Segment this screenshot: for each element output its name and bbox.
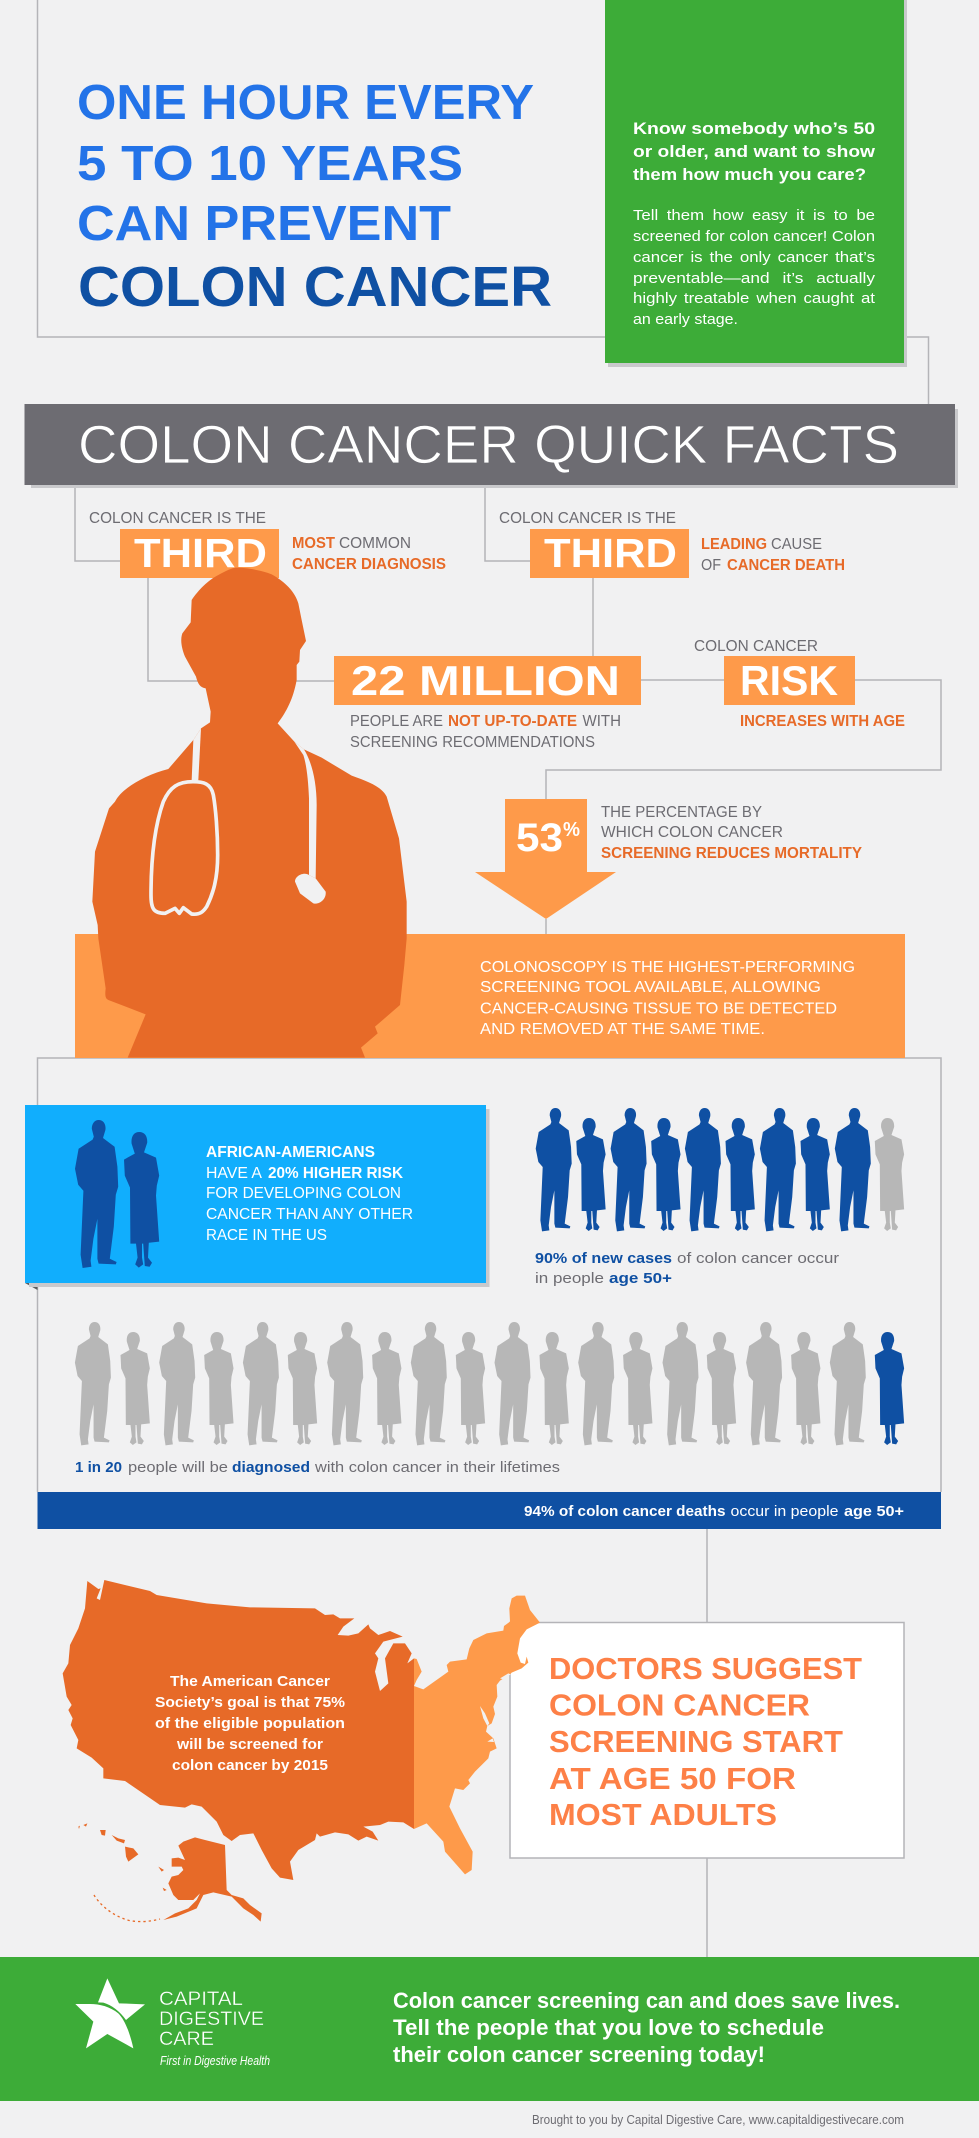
panel: doctors suggest: DOCTORS SUGGEST [549, 1652, 862, 1686]
map caption: colon cancer by 2015 [172, 1757, 328, 1774]
fact: 22 million: 22 MILLION [351, 657, 620, 704]
heading band: quick facts [24, 404, 958, 488]
intro body: preventable—and it’s actually [633, 270, 876, 287]
panel: colonoscopy band: CANCER-CAUSING TISSUE TO BE DETECTED [480, 1000, 837, 1018]
callout text [206, 1144, 413, 1244]
fact: risk increases with age: INCREASES WITH AGE [740, 713, 905, 730]
logo wordmark: CARE [159, 2029, 214, 2050]
fact: 22 million: SCREENING RECOMMENDATIONS [350, 734, 595, 751]
text: percentage reduction: THE PERCENTAGE BY [601, 804, 762, 821]
text: 1 in 20 diagnosed: diagnosed [232, 1459, 310, 1476]
text: percentage reduction: WHICH COLON CANCER [601, 824, 783, 841]
intro question [633, 120, 875, 184]
text: 90 percent of new cases: age 50+ [609, 1270, 672, 1287]
map caption: will be screened for [176, 1736, 323, 1753]
heading band: quick facts: COLON CANCER QUICK FACTS [78, 416, 899, 475]
footer call to action [393, 1988, 900, 2067]
fact: third leading cause of death: THIRD [544, 530, 677, 576]
text: 1 in 20 diagnosed: 1 in 20 [75, 1459, 122, 1476]
intro body: an early stage. [633, 311, 738, 328]
arrow: 53 percent: 53 [516, 816, 563, 860]
text: 90 percent of new cases: 90% of new cases [535, 1250, 672, 1267]
banner: 94 percent of deaths: age 50+ [844, 1503, 904, 1520]
credit line: Brought to you by Capital Digestive Care, www.capitaldigestivecare.com [532, 2113, 904, 2127]
footer call to action: their colon cancer screening today! [393, 2042, 765, 2067]
fact: risk increases with age: COLON CANCER [694, 638, 818, 655]
footer call to action: Tell the people that you love to schedule [393, 2015, 824, 2040]
callout text: CANCER THAN ANY OTHER [206, 1206, 413, 1223]
people chart: 1 in 20 [75, 1322, 904, 1445]
people chart: 90 percent [536, 1108, 904, 1231]
callout text: FOR DEVELOPING COLON [206, 1185, 401, 1202]
fact: third leading cause of death: CANCER DEATH [727, 557, 845, 574]
panel: doctors suggest: AT AGE 50 FOR [549, 1762, 796, 1796]
icon: doctor silhouette [92, 568, 407, 1058]
panel: green intro [605, 0, 907, 367]
callout text: HAVE A [206, 1165, 263, 1182]
callout text: AFRICAN-AMERICANS [206, 1144, 375, 1161]
panel: doctors suggest: COLON CANCER [549, 1688, 810, 1722]
map caption: of the eligible population [155, 1715, 345, 1732]
fact: 22 million: WITH [582, 713, 621, 730]
fact: 22 million: PEOPLE ARE [350, 713, 443, 730]
fact: third most common diagnosis: COMMON [339, 535, 411, 552]
map caption [155, 1673, 345, 1774]
text: 1 in 20 diagnosed: people will be [128, 1459, 228, 1476]
panel: doctors suggest: MOST ADULTS [549, 1798, 777, 1832]
logo wordmark: First in Digestive Health [160, 2053, 270, 2068]
title: 5 TO 10 YEARS [77, 136, 463, 191]
banner: 94 percent of deaths [38, 1492, 941, 1529]
logo wordmark: CAPITAL [159, 1989, 243, 2010]
intro body: highly treatable when caught at [633, 290, 876, 307]
panel: colonoscopy band: COLONOSCOPY IS THE HIGHEST-PERFORMING [480, 959, 855, 976]
fact: third leading cause of death: CAUSE [771, 536, 822, 553]
fact: third most common diagnosis [89, 510, 446, 578]
text: percentage reduction [601, 804, 863, 862]
panel: colonoscopy band [75, 934, 905, 1058]
map caption: The American Cancer [170, 1673, 330, 1690]
text: 90 percent of new cases: in people [535, 1270, 604, 1287]
fact: third most common diagnosis: MOST [292, 535, 336, 552]
panel: colonoscopy band: AND REMOVED AT THE SAME TIME. [480, 1021, 765, 1038]
panel: African-Americans callout [25, 1105, 490, 1290]
text: 90 percent of new cases [535, 1250, 839, 1287]
intro question: Know somebody who’s 50 [633, 120, 875, 138]
footer call to action: Colon cancer screening can and does save lives. [393, 1988, 900, 2013]
title: COLON CANCER [78, 255, 552, 318]
panel: colonoscopy band: SCREENING TOOL AVAILABLE, ALLOWING [480, 979, 821, 996]
intro body [633, 207, 876, 328]
intro question: or older, and want to show [633, 143, 875, 161]
banner: 94 percent of deaths: 94% of colon cancer deaths [524, 1503, 726, 1520]
logo wordmark [159, 1989, 270, 2068]
fact: third leading cause of death [499, 510, 845, 578]
title: CAN PREVENT [77, 196, 451, 251]
fact: risk increases with age: RISK [740, 657, 838, 704]
fact: 22 million [334, 656, 641, 751]
panel: green footer [0, 1957, 979, 2101]
text: 90 percent of new cases: of colon cancer occur [677, 1250, 839, 1267]
fact: third most common diagnosis: CANCER DIAGNOSIS [292, 556, 446, 573]
intro body: screened for colon cancer! Colon [633, 228, 875, 245]
arrow: 53 percent [475, 799, 616, 919]
fact: third leading cause of death: COLON CANCER IS THE [499, 510, 676, 527]
intro question: them how much you care? [633, 166, 866, 184]
logo wordmark: DIGESTIVE [159, 2009, 264, 2030]
map caption: Society’s goal is that 75% [155, 1694, 345, 1711]
intro body: cancer is the only cancer that’s [633, 249, 875, 266]
text: 1 in 20 diagnosed: with colon cancer in their lifetimes [314, 1459, 560, 1476]
fact: third most common diagnosis: THIRD [134, 530, 267, 576]
fact: 22 million: NOT UP-TO-DATE [448, 713, 577, 730]
intro body: Tell them how easy it is to be [633, 207, 875, 224]
text: 1 in 20 diagnosed [75, 1459, 560, 1476]
map: United States [63, 1580, 540, 1922]
callout text: 20% HIGHER RISK [268, 1165, 404, 1182]
panel: doctors suggest: SCREENING START [549, 1725, 843, 1759]
icon: couple silhouette [75, 1120, 159, 1268]
callout text: RACE IN THE US [206, 1227, 327, 1244]
arrow: 53 percent: % [563, 819, 580, 841]
icon: star logo [75, 1978, 145, 2048]
fact: risk increases with age [694, 638, 905, 730]
panel: doctors suggest [510, 1622, 904, 1858]
title: ONE HOUR EVERY [77, 75, 534, 130]
fact: third leading cause of death: LEADING [701, 536, 767, 553]
fact: third leading cause of death: OF [701, 557, 721, 574]
text: percentage reduction: SCREENING REDUCES MORTALITY [601, 845, 863, 862]
fact: third most common diagnosis: COLON CANCER IS THE [89, 510, 266, 527]
banner: 94 percent of deaths: occur in people [730, 1503, 838, 1520]
title [77, 75, 552, 318]
